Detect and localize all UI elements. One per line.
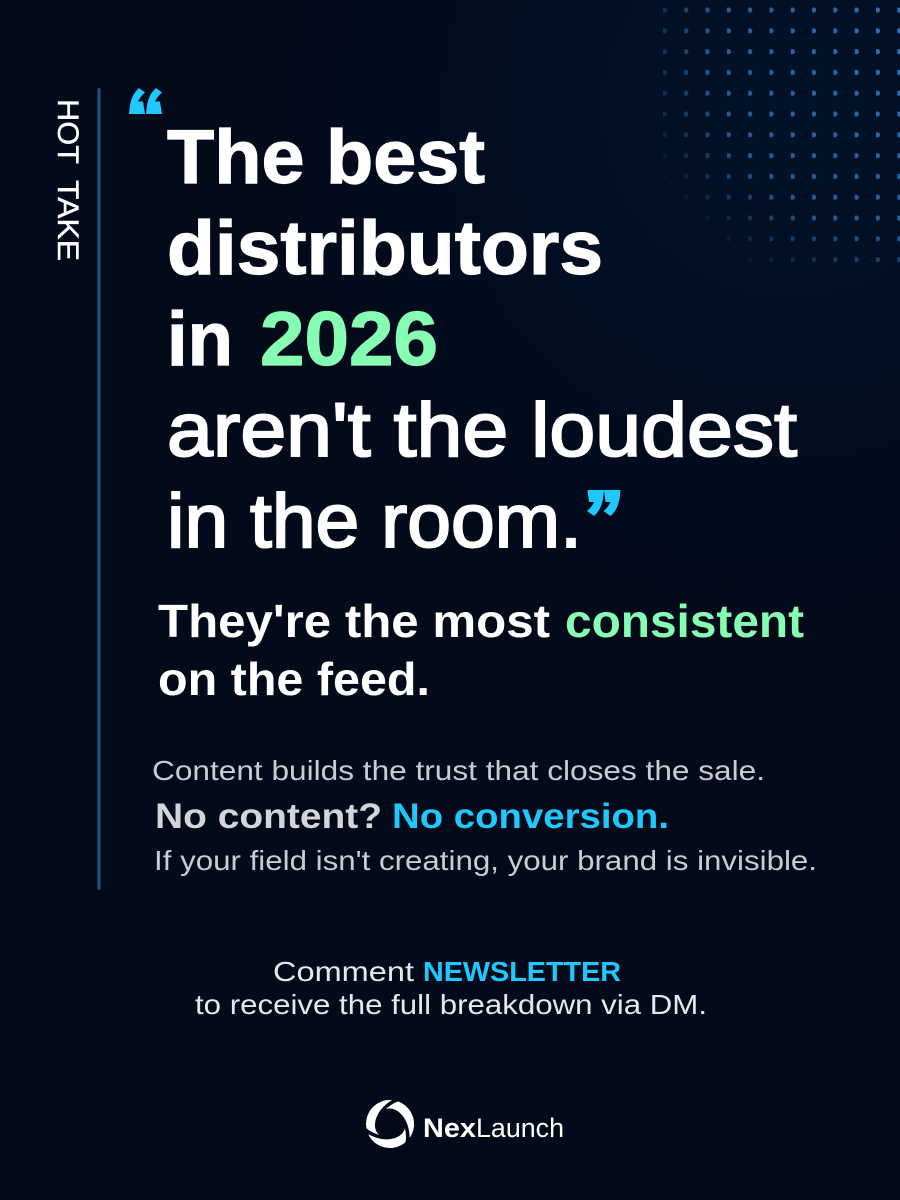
headline quote: in (167, 297, 233, 382)
headline quote: aren't the loudest (167, 388, 797, 473)
call to action: NEWSLETTER (423, 956, 621, 987)
vertical label: HOT TAKE (51, 99, 84, 261)
headline quote: in the room. (167, 479, 582, 564)
supporting text: If your field isn't creating, your brand is invisible. (154, 845, 817, 876)
subheading: consistent (565, 595, 804, 647)
headline quote: distributors (167, 206, 603, 291)
logo: NexLaunch: Launch (476, 1113, 564, 1143)
vertical label: HOT TAKE: HOT (51, 99, 84, 164)
headline quote: 2026 (260, 297, 438, 382)
supporting text: No content? (155, 797, 382, 836)
supporting text (152, 755, 817, 876)
dot grid decoration (660, 0, 900, 270)
headline quote (167, 115, 797, 564)
call to action: Comment (273, 956, 414, 987)
call to action (195, 956, 707, 1020)
logo: NexLaunch: Nex (423, 1113, 476, 1143)
vertical accent line (98, 88, 100, 890)
vertical label: HOT TAKE: TAKE (51, 180, 84, 261)
headline quote: The best (167, 115, 485, 200)
logo: NexLaunch (366, 1098, 564, 1157)
icon: swirl ring (366, 1098, 423, 1157)
call to action: to receive the full breakdown via DM. (195, 989, 707, 1020)
subheading: They're the most (158, 595, 550, 647)
supporting text: No conversion. (392, 797, 669, 836)
closing quote mark (587, 490, 620, 516)
subheading: on the feed. (158, 653, 430, 705)
opening quote mark (129, 88, 162, 114)
subheading (158, 595, 804, 705)
supporting text: Content builds the trust that closes the sale. (152, 755, 765, 786)
